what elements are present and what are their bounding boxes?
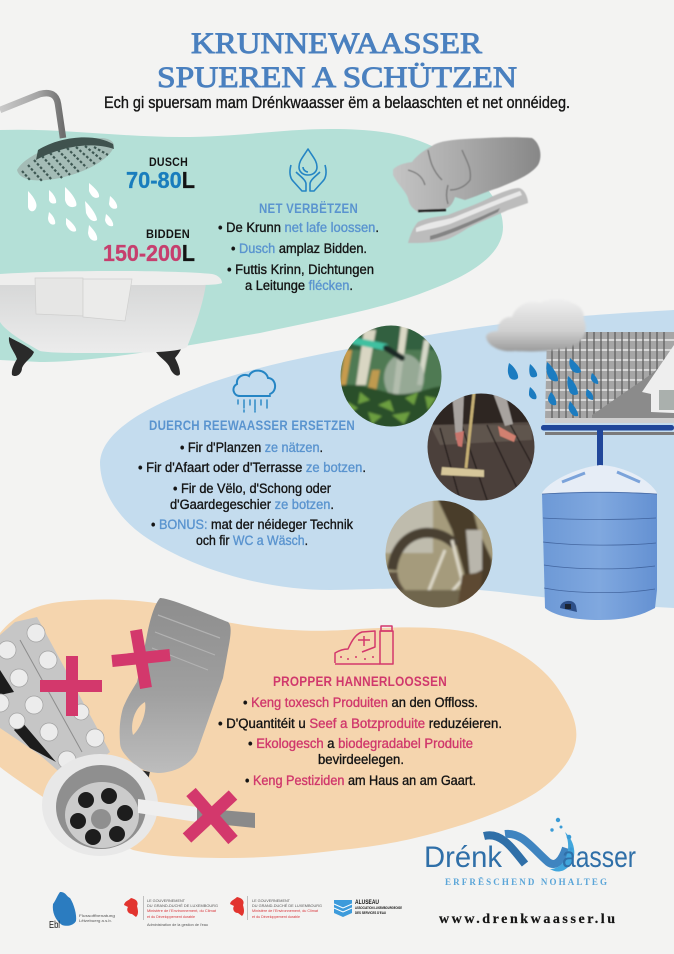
image: detergent bottle xyxy=(120,598,231,782)
logo: government administration xyxy=(124,896,218,927)
text: reewaasser list: • Fir d'Planzen ze nätzen. xyxy=(180,440,323,455)
stat: dusch xyxy=(126,155,195,193)
icon: white water drops xyxy=(28,183,117,241)
heading: net verbetzen: NET VERBËTZEN xyxy=(259,201,358,216)
logo: government ministry: Ministère de l'Environnement, du Climat xyxy=(252,908,319,913)
text: hannerloossen list: bevirdeelegen. xyxy=(318,752,404,767)
icon: blue rain drops xyxy=(508,358,598,416)
text: reewaasser list xyxy=(138,440,366,548)
stat: bidden xyxy=(103,227,195,266)
subtitle: Ech gi spuersam mam Drénkwaasser ëm a belaaschten et net onnéideg. xyxy=(104,94,570,112)
image: hand on tap xyxy=(393,137,540,243)
logo: aluseau: DES SERVICES D'EAU xyxy=(355,910,386,915)
text: net verbetzen list: • De Krunn net lafe loossen. xyxy=(218,220,379,235)
stat: dusch: 70-80L xyxy=(126,167,195,193)
icon: hands holding drop xyxy=(290,149,326,191)
logo: government ministry: LE GOUVERNEMENT xyxy=(252,898,291,903)
logo: ebl: Ebl xyxy=(49,920,60,931)
photo: muddy bike xyxy=(383,498,495,610)
stat: bidden: BIDDEN xyxy=(146,227,190,241)
logo: aluseau: ALUSEAU xyxy=(355,900,379,906)
heading: propper hannerloossen: PROPPER HANNERLOOSSEN xyxy=(273,674,447,689)
text: hannerloossen list: • Keng toxesch Produiten an den Offloss. xyxy=(243,695,478,710)
image: house roof xyxy=(545,332,674,435)
stat: bidden: 150-200L xyxy=(103,240,195,266)
logo: drenkwaasser: Drénk xyxy=(424,841,503,874)
text: reewaasser list: d'Gaardegeschier ze botzen. xyxy=(170,497,334,512)
logo: government administration: LE GOUVERNEMENT xyxy=(147,898,186,903)
logo: ebl: Lëtzebuerg a.s.b. xyxy=(79,918,112,923)
photo: scrubbing deck xyxy=(425,390,537,502)
text: net verbetzen list: • Futtis Krinn, Dichtungen xyxy=(227,262,374,277)
image: pill blister pack xyxy=(0,617,110,783)
stat: dusch: DUSCH xyxy=(149,155,188,169)
icon: pink crosses xyxy=(40,630,233,840)
icon: rain cloud xyxy=(233,371,275,412)
logo: drenkwaasser xyxy=(424,818,636,887)
website url: www.drenkwaasser.lu xyxy=(439,912,615,927)
text: reewaasser list: • Fir d'Afaart oder d'Terrasse ze botzen. xyxy=(138,460,366,475)
text: hannerloossen list: • Ekologesch a biodegradabel Produite xyxy=(248,736,473,751)
logo: government ministry: et du Développement durable xyxy=(252,914,301,919)
logo: government administration: Ministère de l'Environnement, du Climat xyxy=(147,908,217,913)
image: bathtub xyxy=(0,271,222,376)
text: hannerloossen list: • D'Quantitéit u Seef a Botzproduite reduzéieren. xyxy=(218,716,502,731)
logo: ebl xyxy=(49,892,115,931)
text: net verbetzen list xyxy=(218,220,379,293)
logo: government administration: et du Développement durable xyxy=(147,914,196,919)
logo: drenkwaasser: aasser xyxy=(562,841,636,874)
logo: aluseau: ASSOCIATION LUXEMBOURGEOISE xyxy=(355,905,402,910)
logo: drenkwaasser: ERFRËSCHEND NOHALTEG xyxy=(445,877,607,887)
logo: ebl: Flussoffbenatung xyxy=(79,913,115,918)
image: cigarette xyxy=(138,799,255,828)
logo: government administration: Administration de la gestion de l'eau xyxy=(147,922,208,927)
text: reewaasser list: • BONUS: mat der néideger Technik xyxy=(151,517,353,532)
title: SPUEREN A SCHÜTZEN xyxy=(157,61,517,94)
logo: aluseau xyxy=(334,900,402,917)
heading: duerch reewaasser: DUERCH REEWAASSER ERSETZEN xyxy=(149,418,355,433)
image: sink drain xyxy=(42,754,158,856)
logo: government ministry: DU GRAND-DUCHÉ DE LUXEMBOURG xyxy=(252,903,322,908)
text: hannerloossen list xyxy=(218,695,502,788)
panel: blue blob xyxy=(100,310,674,608)
text: hannerloossen list: • Keng Pestiziden am Haus an am Gaart. xyxy=(245,773,476,788)
text: net verbetzen list: a Leitunge flécken. xyxy=(245,278,353,293)
text: net verbetzen list: • Dusch amplaz Bidden. xyxy=(231,241,367,256)
text: reewaasser list: och fir WC a Wäsch. xyxy=(196,533,308,548)
title xyxy=(157,27,517,94)
text: reewaasser list: • Fir de Vëlo, d'Schong oder xyxy=(173,481,331,496)
logo: government ministry xyxy=(230,896,322,920)
image: gutter and downpipe xyxy=(541,425,674,467)
panel: green blob xyxy=(0,129,503,362)
panel: orange blob xyxy=(0,600,576,858)
image: shower xyxy=(0,93,114,181)
image: rain cloud xyxy=(486,299,586,351)
logo: government administration: DU GRAND-DUCHÉ DE LUXEMBOURG xyxy=(147,903,218,908)
image: water tank xyxy=(542,465,657,620)
photo: watering plants xyxy=(340,326,442,426)
icon: hand with cleaning products xyxy=(335,626,393,664)
title: KRUNNEWAASSER xyxy=(191,27,482,60)
